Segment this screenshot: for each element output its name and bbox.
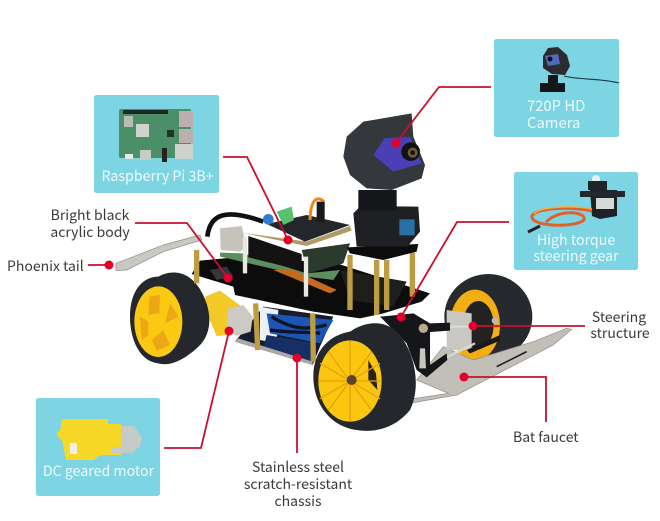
panel: steering gear (514, 172, 638, 270)
leader: dc motor (164, 326, 234, 448)
leader: bat faucet (460, 372, 546, 422)
panel text: Raspberry Pi 3B+ (101, 166, 214, 186)
panel: camera (494, 39, 619, 137)
lower chassis and battery (235, 307, 333, 365)
label: stainless steel chassis: scratch-resistant (244, 474, 353, 494)
label: phoenix tail: Phoenix tail (7, 256, 84, 276)
panel text: DC geared motor (43, 461, 155, 481)
label: bat faucet: Bat faucet (513, 427, 579, 447)
phoenix tail plate (116, 235, 202, 271)
panel text: High torque (537, 230, 615, 250)
brass pillars (197, 250, 412, 362)
panel text: Camera (527, 112, 580, 133)
label: stainless steel chassis: chassis (274, 491, 322, 511)
icon: motor (57, 419, 142, 460)
rear wheel (130, 272, 209, 364)
icon: camera (540, 47, 619, 92)
acrylic body plate (192, 257, 430, 318)
label: bright black acrylic body: acrylic body (50, 222, 130, 242)
pcb stack (207, 199, 352, 297)
panel: dc geared motor (36, 398, 160, 496)
leader: chassis (292, 354, 302, 453)
panel text: steering gear (533, 246, 619, 266)
icon: servo (528, 175, 625, 232)
panel text: 720P HD (527, 95, 585, 116)
label: stainless steel chassis: Stainless steel (252, 457, 344, 477)
leader: steering structure (468, 322, 585, 330)
label: bright black acrylic body: Bright black (51, 205, 130, 225)
far right wheel and steering assembly (380, 274, 572, 405)
gear motor on the car (205, 291, 253, 336)
leader: phoenix tail (88, 260, 114, 270)
label: steering structure: Steering (592, 307, 646, 327)
camera head (343, 113, 425, 190)
icon: raspberry pi board (119, 109, 193, 162)
leader: acrylic body (135, 223, 232, 282)
label: steering structure: structure (590, 323, 650, 343)
leader: raspberry pi (223, 157, 292, 244)
pan tilt servo (347, 190, 420, 260)
panel: raspberry pi (94, 95, 219, 193)
robot car photo (116, 113, 572, 431)
leader: steering gear (396, 222, 509, 322)
front wheel (313, 323, 416, 431)
leader: camera (392, 87, 491, 148)
